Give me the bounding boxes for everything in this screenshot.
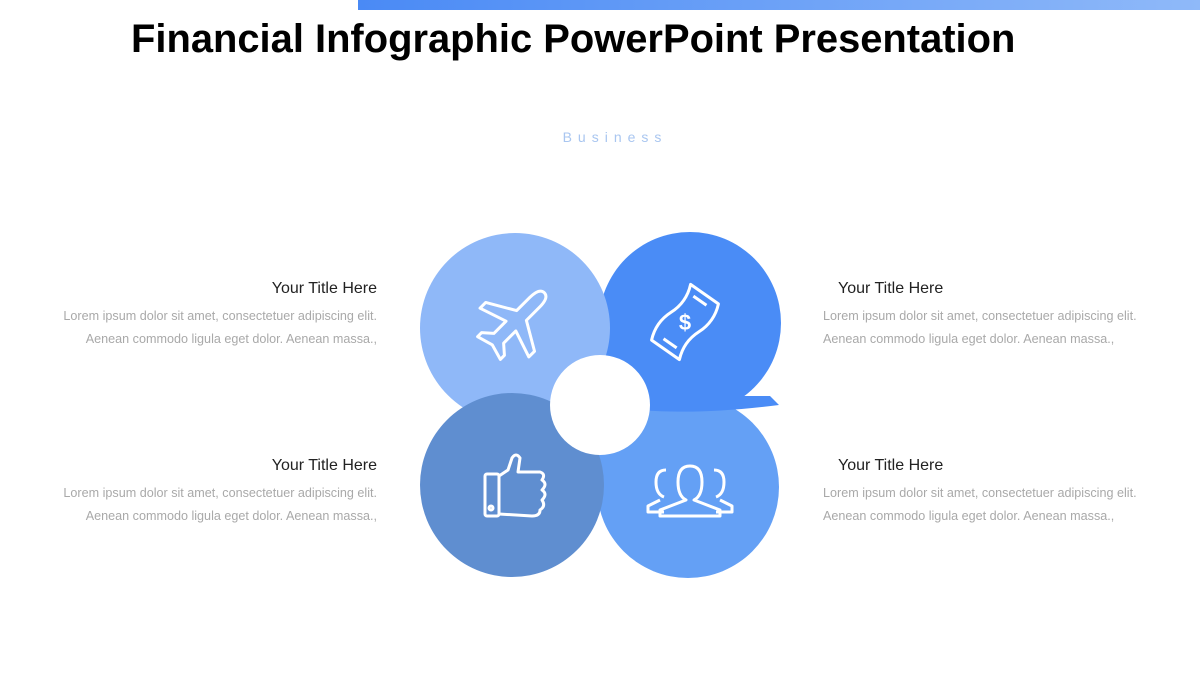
text block: top right: Your Title Here — [838, 280, 943, 297]
icon: thumbs up — [485, 455, 545, 516]
top gradient bar — [358, 0, 1200, 10]
text block: top left: Lorem ipsum dolor sit amet, consectetuer adipiscing elit. — [63, 309, 377, 323]
petal: top left — [420, 233, 610, 423]
text block: bottom left — [63, 457, 377, 523]
text block: bottom left: Aenean commodo ligula eget dolor. Aenean massa., — [86, 509, 377, 523]
text block: bottom right: Aenean commodo ligula eget dolor. Aenean massa., — [823, 509, 1114, 523]
petal: bottom left — [420, 393, 604, 577]
subtitle: Business — [563, 129, 667, 145]
text block: bottom left: Your Title Here — [272, 457, 377, 474]
petal overlap: top right over bottom right — [640, 396, 779, 412]
icon: people — [648, 466, 732, 516]
petal fill: inner quadrants — [512, 324, 690, 487]
text block: bottom right: Your Title Here — [838, 457, 943, 474]
text block: top left: Your Title Here — [272, 280, 377, 297]
text block: top left — [63, 280, 377, 346]
text block: top right — [823, 280, 1137, 346]
title: Financial Infographic PowerPoint Presentation — [131, 17, 1015, 61]
petal: bottom right — [597, 396, 779, 578]
text block: bottom right — [823, 457, 1137, 523]
icon: airplane — [465, 268, 569, 372]
text block: top left: Aenean commodo ligula eget dolor. Aenean massa., — [86, 332, 377, 346]
text block: top right: Lorem ipsum dolor sit amet, consectetuer adipiscing elit. — [823, 309, 1137, 323]
text block: bottom left: Lorem ipsum dolor sit amet, consectetuer adipiscing elit. — [63, 486, 377, 500]
icon: money bill: $ — [679, 310, 691, 335]
center circle — [550, 355, 650, 455]
text block: bottom right: Lorem ipsum dolor sit amet, consectetuer adipiscing elit. — [823, 486, 1137, 500]
petal: top right — [599, 232, 781, 414]
icon: money bill — [649, 282, 721, 362]
text block: top right: Aenean commodo ligula eget dolor. Aenean massa., — [823, 332, 1114, 346]
